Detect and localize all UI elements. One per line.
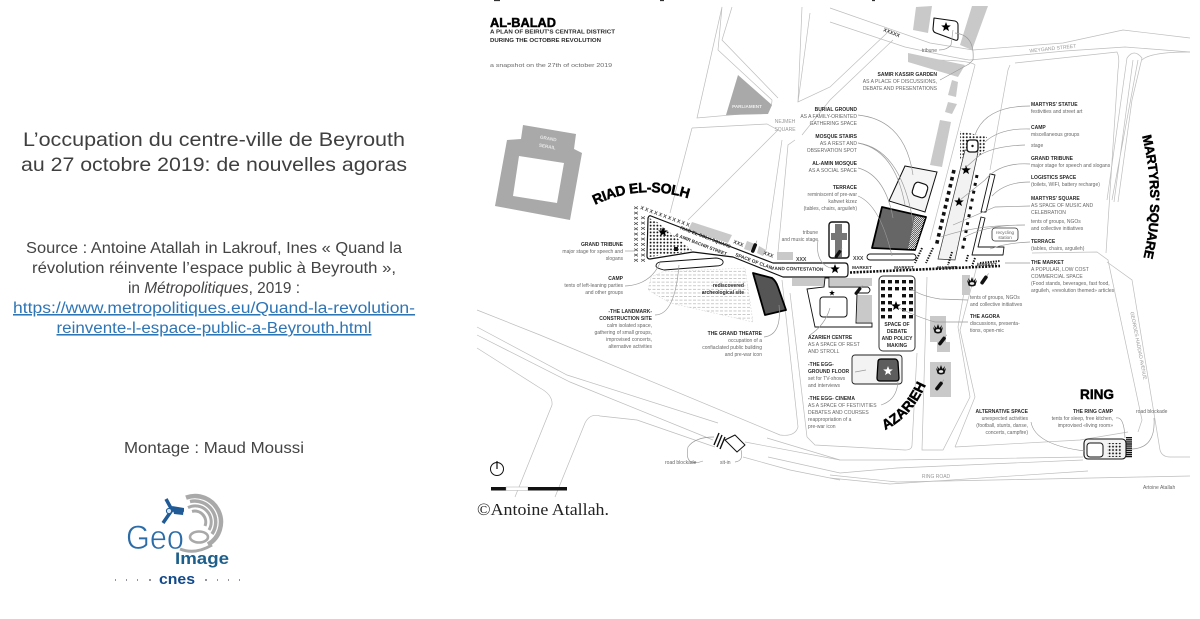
- labels: Ring side: ALTERNATIVE SPACE: [975, 409, 1029, 415]
- barricades XXX: XXXXX: [882, 27, 901, 40]
- labels: Martyrs' Square column: TERRACE: [1031, 239, 1056, 245]
- Space of debate and policy making: MAKING: [887, 343, 907, 349]
- labels: Ring side: concerts, campfire): [985, 430, 1028, 436]
- grey blocks around Riad El-Solh: [688, 222, 793, 260]
- labels: Riad El-Solh side: calm isolated space,: [607, 323, 652, 329]
- market line: MARKET: [937, 265, 957, 270]
- label: Nejmeh Square: [774, 119, 796, 133]
- Space of debate and policy making: AND POLICY: [882, 336, 913, 342]
- source text block: https://www.metropolitiques.eu/Quand-la-revolution-: [13, 300, 415, 317]
- title block: AL-BALAD: DURING THE OCTOBRE REVOLUTION: [490, 38, 601, 44]
- barricades XXX: XXXXXXXXXXX: [639, 205, 691, 229]
- labels: Ring side: (football, stunts, danse,: [976, 423, 1028, 429]
- heading: Azarieh: AZARIEH: [884, 381, 926, 430]
- labels: central column: and music stage: [782, 237, 818, 243]
- labels: central column: tribune: [922, 48, 937, 54]
- labels: central column: DEBATE AND PRESENTATIONS: [863, 86, 938, 92]
- heading: Martyrs' Square: MARTYRS' SQUARE: [1142, 134, 1160, 260]
- road blockade and sit-in: [714, 433, 745, 452]
- labels: central column: tribune: [803, 230, 818, 236]
- labels: Riad El-Solh side: occupation of a: [728, 338, 762, 344]
- labels: central column: BURIAL GROUND: [815, 107, 857, 113]
- labels: Martyrs' Square column: discussions, presenta-: [970, 321, 1020, 327]
- street network: [477, 7, 1190, 497]
- heading: Riad El-Solh: RIAD EL-SOLH: [592, 182, 690, 205]
- title: L’occupation du centre-ville de Beyrouth: [23, 129, 405, 151]
- labels: Riad El-Solh side: major stage for speech and: [562, 249, 623, 255]
- barricades XXX: XXX: [732, 239, 745, 249]
- title block: AL-BALAD: a snapshot on the 27th of october 2019: [490, 63, 612, 69]
- barricades XXX: XXX: [762, 250, 775, 260]
- labels: Martyrs' Square column: AS SPACE OF MUSIC AND: [1031, 203, 1094, 209]
- labels: Azarieh side: AZARIEH CENTRE: [808, 335, 853, 341]
- labels: Martyrs' Square column: tents of groups, NGOs: [970, 295, 1020, 301]
- labels: Martyrs' Square column: GRAND TRIBUNE: [1031, 156, 1074, 162]
- labels: Azarieh side: [808, 335, 877, 430]
- title: [21, 129, 407, 176]
- burial ground: [889, 166, 937, 212]
- labels: Riad El-Solh side: THE GRAND THEATRE: [708, 331, 763, 337]
- labels: Martyrs' Square column: major stage for speech and slogans: [1031, 163, 1111, 169]
- title: au 27 octobre 2019: de nouvelles agoras: [21, 154, 407, 176]
- labels: Riad El-Solh side: CAMP: [608, 276, 624, 282]
- market line: [850, 248, 1000, 272]
- labels: Martyrs' Square column: (toilets, WIFI, battery recharge): [1031, 182, 1100, 188]
- source text block: reinvente-l-espace-public-a-Beyrouth.html: [56, 320, 372, 337]
- logistics space and terrace: [972, 174, 1004, 255]
- labels: Azarieh side: DEBATES AND COURSES: [808, 410, 869, 416]
- labels: Azarieh side: and interviews: [808, 383, 840, 389]
- Space of debate and policy making: SPACE OF: [884, 322, 910, 328]
- labels: Martyrs' Square column: (tables, chairs, arguileh): [1031, 246, 1085, 252]
- street names: WEYGAND STREET: [1029, 44, 1077, 54]
- archaeological site: [648, 268, 753, 322]
- Martyrs' Square strip: [936, 131, 987, 260]
- labels: Riad El-Solh side: and pre-war icon: [725, 352, 762, 358]
- labels: Azarieh side: -THE EGG-: [808, 362, 834, 368]
- labels: Martyrs' Square column: festivities and street art: [1031, 109, 1083, 115]
- labels: central column: TERRACE: [833, 185, 858, 191]
- The Egg: [852, 355, 902, 384]
- labels: Martyrs' Square column: THE AGORA: [970, 314, 1000, 320]
- recycling station: station: [998, 235, 1012, 240]
- labels: central column: AS A REST AND: [820, 141, 857, 147]
- labels: Ring side: Artoine Atallah: [1143, 485, 1175, 491]
- labels: Martyrs' Square column: CELEBRATION: [1031, 210, 1066, 216]
- Riad El-Solh square and street band: [646, 215, 849, 278]
- torch on Riad El-Solh band: [750, 240, 759, 253]
- labels: Martyrs' Square column: and collective initiatives: [970, 302, 1023, 308]
- label: Nejmeh Square: SQUARE: [774, 127, 796, 133]
- labels: Ring side: road blockade: [1136, 409, 1168, 415]
- labels: Ring side: road blockade: [665, 460, 697, 466]
- labels: central column: AS A SOCIAL SPACE: [809, 168, 858, 174]
- market line: MARKET: [977, 262, 997, 267]
- labels: central column: SAMIR KASSIR GARDEN: [878, 72, 937, 78]
- market line: MARKET: [852, 265, 872, 270]
- labels: Martyrs' Square column: miscellaneous groups: [1031, 132, 1080, 138]
- barricades XXX: XXX: [796, 257, 807, 263]
- labels: Riad El-Solh side: slogans: [606, 256, 623, 262]
- labels: Martyrs' Square column: [970, 102, 1115, 334]
- labels: Ring side: sit-in: [720, 460, 731, 466]
- labels: Martyrs' Square column: COMMERCIAL SPACE: [1031, 274, 1083, 280]
- labels: Ring side: THE RING CAMP: [1073, 409, 1114, 415]
- source text block: révolution réinvente l’espace public à Beyrouth »,: [32, 260, 396, 277]
- archaeological site: archeological site: [702, 290, 744, 296]
- labels: central column: AS A FAMILY-ORIENTED: [800, 114, 857, 120]
- labels: Ring side: tents for sleep, free kitchen,: [1052, 416, 1113, 422]
- Space of debate and policy making: DEBATE: [887, 329, 908, 335]
- labels: central column: GATHERING SPACE: [810, 121, 858, 127]
- theatre: [753, 273, 786, 315]
- building: Parliament: PARLIAMENT: [732, 104, 762, 109]
- labels: Azarieh side: AS A SPACE OF REST: [808, 342, 860, 348]
- labels: Riad El-Solh side: improvised concerts,: [606, 337, 652, 343]
- labels: Riad El-Solh side: CONSTRUCTION SITE: [599, 316, 653, 322]
- monument: cross and tribune: [829, 222, 849, 273]
- labels: central column: kahwet kizez: [828, 199, 857, 205]
- street names: RING ROAD: [922, 474, 951, 480]
- labels: central column: [782, 48, 938, 243]
- labels: Riad El-Solh side: confiaclated public building: [702, 345, 762, 351]
- title block: AL-BALAD: A PLAN OF BEIRUT'S CENTRAL DISTRICT: [490, 30, 616, 36]
- archaeological site: rediscovered: [713, 283, 744, 289]
- labels: Martyrs' Square column: and collective initiatives: [1031, 226, 1084, 232]
- source text block: [13, 240, 415, 337]
- labels: Azarieh side: AS A SPACE OF FESTIVITIES: [808, 403, 877, 409]
- top cropped caption fragments: [494, 0, 875, 2]
- labels: Riad El-Solh side: alternative activities: [608, 344, 652, 350]
- labels: Azarieh side: AND STROLL: [808, 349, 840, 355]
- labels: Riad El-Solh side: -THE LANDMARK-: [608, 309, 652, 315]
- labels: Riad El-Solh side: [562, 242, 763, 358]
- labels: Azarieh side: set for TV-shows: [808, 376, 846, 382]
- market line: MARKET: [894, 265, 914, 270]
- logo: GeoImage CNES: cnes: [159, 571, 195, 588]
- source text block: Source : Antoine Atallah in Lakrouf, Ines « Quand la: [26, 240, 402, 257]
- Riad El-Solh square and street band: RIAD EL-SOLH SQUARE: [680, 225, 731, 249]
- tribune at garden: [933, 18, 958, 40]
- barricades XXX: XXX: [853, 256, 864, 262]
- labels: Martyrs' Square column: A POPULAR, LOW COST: [1031, 267, 1089, 273]
- map: Al-Balad plan of Beirut central district: [476, 6, 1190, 497]
- labels: central column: AS A PLACE OF DISCUSSIONS,: [863, 79, 937, 85]
- labels: Azarieh side: -THE EGG- CINEMA: [808, 396, 855, 402]
- Riad El-Solh square and street band: & AMIR BACHIR STREET: [675, 232, 728, 257]
- scale bar: [491, 487, 567, 490]
- labels: Martyrs' Square column: MARTYRS' STATUE: [1031, 102, 1078, 108]
- labels: Martyrs' Square column: THE MARKET: [1031, 260, 1064, 266]
- title block: AL-BALAD: AL-BALAD: [490, 16, 556, 30]
- Space of debate and policy making: [879, 276, 915, 351]
- ring camp: [1084, 437, 1129, 459]
- street names: [922, 44, 1148, 480]
- labels: central column: OBSERVATION SPOT: [807, 148, 857, 154]
- labels: Martyrs' Square column: arguileh, «revolution themed» articles: [1031, 288, 1115, 294]
- labels: Martyrs' Square column: LOGISTICS SPACE: [1031, 175, 1077, 181]
- heading: Ring: RING: [1080, 386, 1114, 402]
- labels: Azarieh side: pre-war icon: [808, 424, 836, 430]
- labels: Martyrs' Square column: stage: [1031, 143, 1043, 149]
- building: Grand Serail: SERAIL: [539, 143, 556, 150]
- labels: central column: AL-AMIN MOSQUE: [812, 161, 858, 167]
- leader lines: [625, 30, 1154, 463]
- labels: central column: (tables, chairs, arguileh): [804, 206, 857, 212]
- agora icons: fire and torch: [930, 272, 990, 397]
- barricades XXX: XXXXXXXXX: [641, 215, 647, 262]
- mosque terrace: [867, 207, 926, 260]
- labels: Riad El-Solh side: tents of left-leaning parties: [564, 283, 623, 289]
- labels: Azarieh side: GROUND FLOOR: [808, 369, 849, 375]
- labels: Martyrs' Square column: (Food stands, beverages, fast food,: [1031, 281, 1110, 287]
- labels: Ring side: improvised «living room»: [1058, 423, 1113, 429]
- building: Grand Serail: [495, 125, 582, 220]
- labels: Azarieh side: reappropriation of a: [808, 417, 852, 423]
- credit: montage: Montage : Maud Moussi: [124, 440, 304, 457]
- logo: GeoImage CNES: [115, 496, 240, 588]
- labels: central column: MOSQUE STAIRS: [815, 134, 858, 140]
- labels: Martyrs' Square column: tents of groups, NGOs: [1031, 219, 1081, 225]
- barricades XXX: [634, 27, 901, 263]
- labels: Martyrs' Square column: CAMP: [1031, 125, 1046, 131]
- recycling station: recycling: [996, 230, 1015, 235]
- label: Nejmeh Square: NEJMEH: [775, 119, 796, 125]
- labels: Ring side: [665, 409, 1175, 491]
- labels: Riad El-Solh side: gathering of small groups,: [594, 330, 652, 336]
- building: Grand Serail: GRAND: [540, 135, 558, 143]
- labels: Ring side: unexpected activities: [982, 416, 1028, 422]
- labels: Riad El-Solh side: GRAND TRIBUNE: [581, 242, 624, 248]
- logo: GeoImage CNES: Image: [175, 550, 229, 568]
- garden: Samir Kassir: [908, 6, 988, 167]
- barricades XXX: XXXXXXXXXXX: [634, 205, 640, 262]
- building: Parliament: [726, 75, 772, 115]
- street names: GEORGES HADDAD AVENUE: [1128, 311, 1148, 381]
- source text block: in Métropolitiques, 2019 :: [128, 280, 300, 297]
- north arrow: [490, 461, 504, 476]
- logo: GeoImage CNES: Geo: [126, 519, 184, 557]
- title block: AL-BALAD: [490, 16, 616, 69]
- labels: Riad El-Solh side: and other groups: [585, 290, 623, 296]
- credit: Antoine Atallah: ©Antoine Atallah.: [477, 500, 609, 519]
- labels: Martyrs' Square column: MARTYRS' SQUARE: [1031, 196, 1080, 202]
- recycling station: [992, 228, 1018, 241]
- labels: Martyrs' Square column: tions, open-mic: [970, 328, 1004, 334]
- Azarieh Centre: [792, 278, 872, 327]
- Riad El-Solh square and street band: SPACE OF CLAIM AND CONTESTATION: [735, 253, 824, 271]
- labels: central column: reminiscent of pre-war: [808, 192, 857, 198]
